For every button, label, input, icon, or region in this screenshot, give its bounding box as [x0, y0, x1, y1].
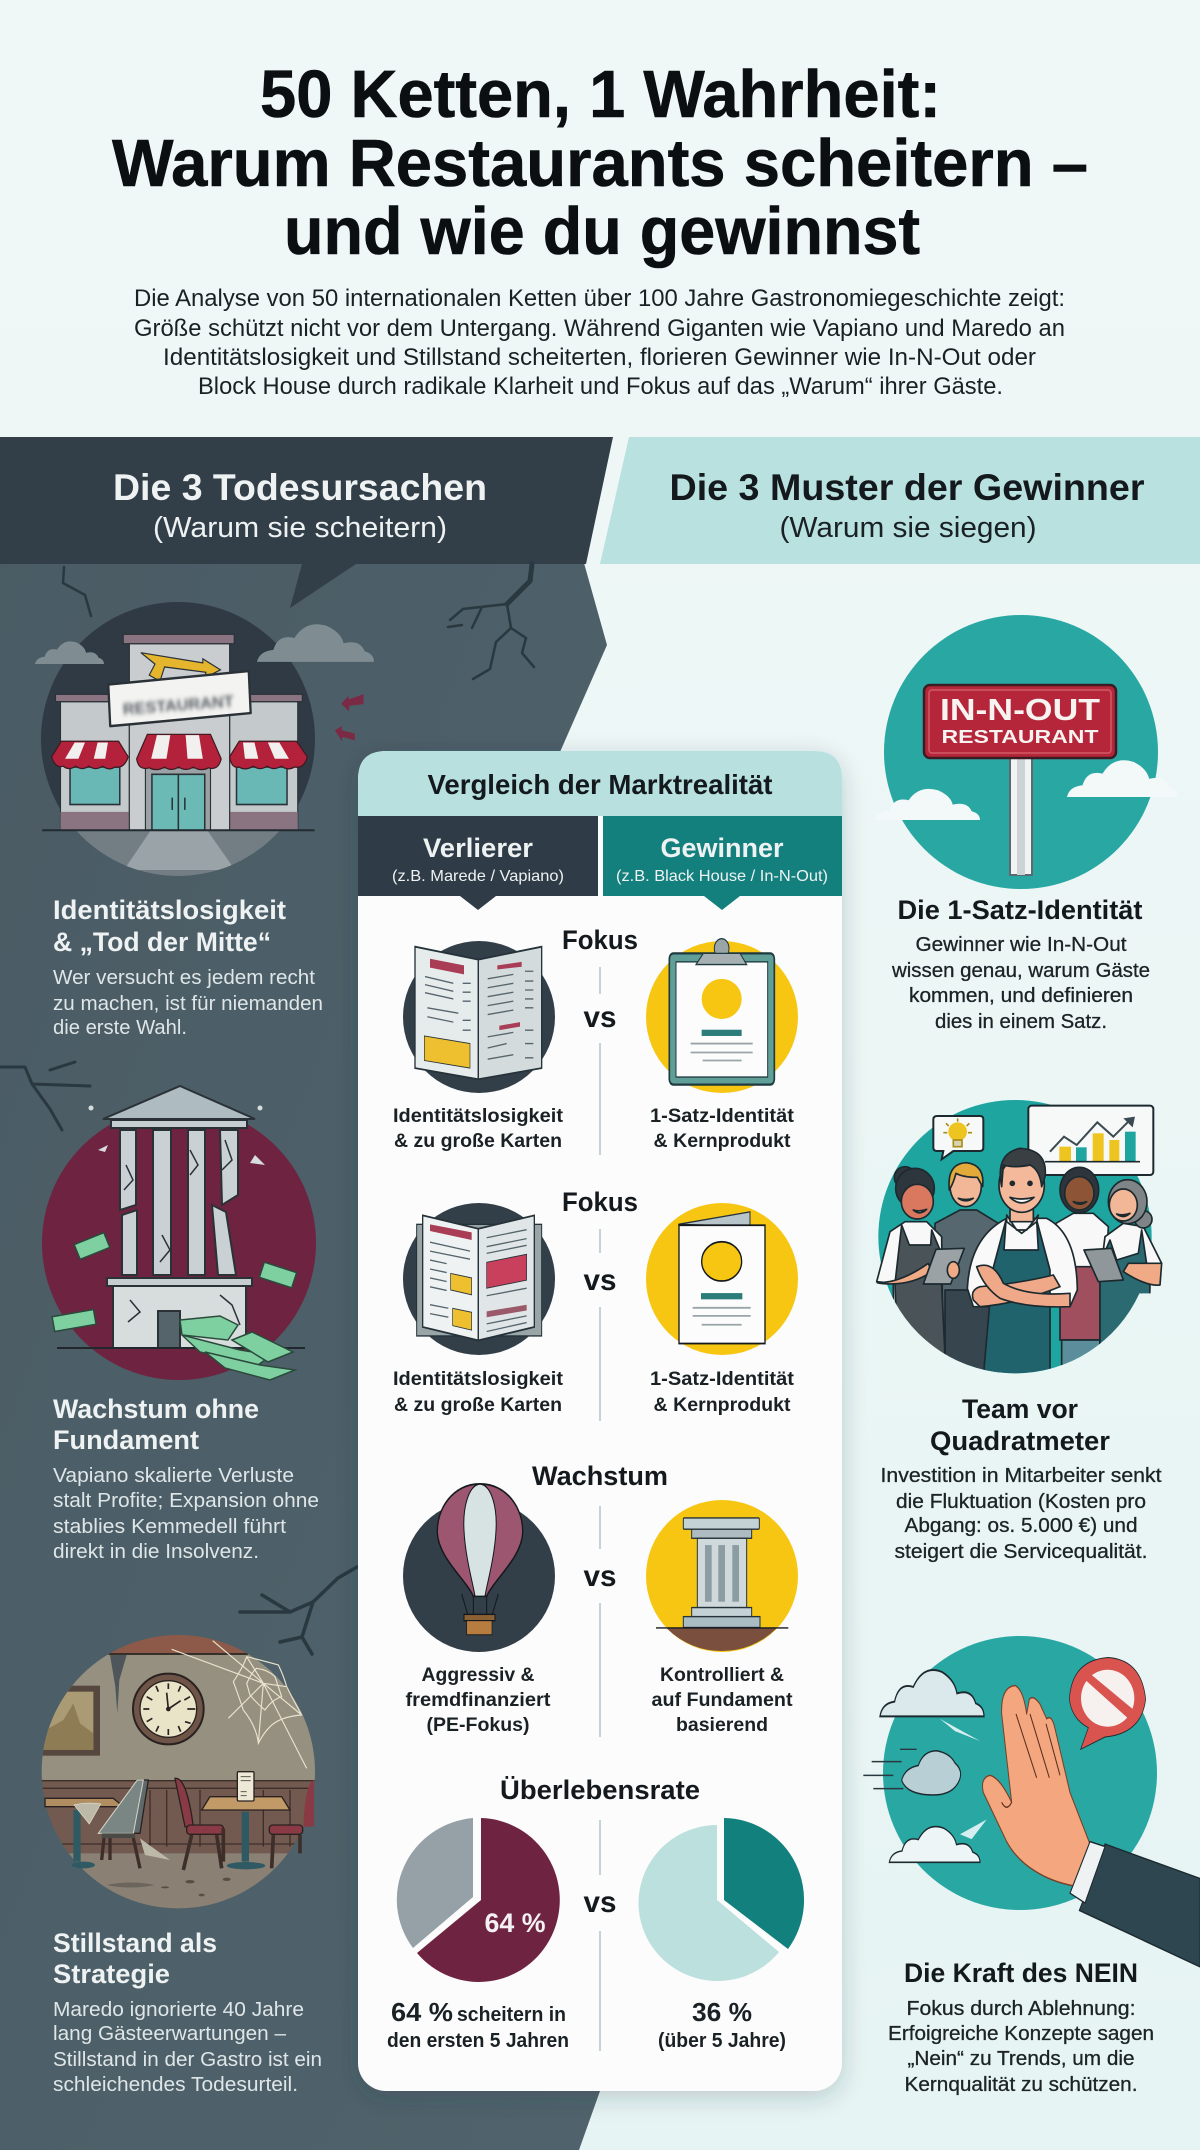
text: pattern 2: Abgang: os. 5.000 €) und [904, 1515, 1138, 1537]
vs label: vs [584, 1001, 616, 1034]
pie caption: failure: 64 % [391, 1997, 453, 2027]
card heading [358, 751, 842, 816]
dark left panel [0, 437, 611, 2150]
icon: solid column [640, 1500, 803, 1655]
text: cause 2: direkt in die Insolvenz. [53, 1541, 259, 1563]
row 3 captions: auf Fundament [652, 1690, 793, 1711]
pie caption: failure: den ersten 5 Jahren [387, 2030, 569, 2052]
column header: winners: Gewinner [660, 833, 784, 863]
title: Warum Restaurants scheitern – [112, 126, 1088, 201]
panel: comparison card [358, 751, 842, 2091]
row 1 captions: Identitätslosigkeit [393, 1106, 564, 1127]
row 1 captions: & zu große Karten [394, 1131, 562, 1152]
intro text block: Größe schützt nicht vor dem Untergang. Während Giganten wie Vapiano und Maredo an [134, 315, 1065, 342]
pie chart: survival rate [639, 1818, 804, 1981]
icon: abandoned restaurant interior [42, 1635, 315, 1908]
text: cause 3: Stillstand als [53, 1928, 217, 1958]
text: cause 3: Stillstand in der Gastro ist ein [53, 2049, 322, 2071]
text: cause 1: zu machen, ist für niemanden [53, 993, 323, 1015]
text: pattern 1: dies in einem Satz. [935, 1011, 1107, 1033]
icon: one page card [646, 1203, 798, 1355]
icon: failed restaurant [35, 602, 374, 880]
text: cause 2: Vapiano skalierte Verluste [53, 1465, 294, 1487]
icon: in-n-out sign: IN-N-OUT [940, 692, 1100, 727]
column header: losers: (z.B. Marede / Vapiano) [392, 868, 564, 885]
text: pattern 2 [880, 1394, 1162, 1563]
row 3: Wachstum heading: Wachstum [532, 1461, 668, 1491]
icon: crumbling bank with money [42, 1086, 316, 1380]
text: pattern 1: wissen genau, warum Gäste [891, 960, 1150, 982]
vs label: vs [584, 1560, 616, 1593]
vs label: vs [584, 1264, 616, 1297]
row 1 captions: 1-Satz-Identität [650, 1106, 795, 1127]
text: cause 2: stalt Profite; Expansion ohne [53, 1490, 319, 1512]
text: cause 2: Wachstum ohne [53, 1394, 259, 1424]
icon: in-n-out sign: RESTAURANT [942, 727, 1098, 747]
text: cause 3: lang Gästeerwartungen – [53, 2023, 287, 2045]
intro text block: Identitätslosigkeit und Stillstand scheiterten, florieren Gewinner wie In-N-Out oder [163, 344, 1036, 371]
row 1 captions: & Kernprodukt [654, 1131, 791, 1152]
header: causes: (Warum sie scheitern) [153, 512, 447, 544]
text: cause 1: Wer versucht es jedem recht [53, 967, 315, 989]
card heading: Vergleich der Marktrealität [428, 769, 772, 800]
header: winners: (Warum sie siegen) [780, 512, 1036, 544]
text: cause 1 [53, 895, 323, 1039]
pie chart: failure rate [397, 1818, 560, 1982]
intro text block [134, 285, 1065, 400]
text: pattern 2: Investition in Mitarbeiter senkt [880, 1465, 1162, 1487]
text: pattern 3: Fokus durch Ablehnung: [906, 1998, 1136, 2020]
row 3 captions: basierend [676, 1715, 768, 1736]
column header: losers [358, 816, 598, 910]
text: cause 1: Identitätslosigkeit [53, 895, 286, 925]
row 3 captions: Aggressiv & [422, 1665, 535, 1686]
row 3 captions: Kontrolliert & [660, 1665, 784, 1686]
text: pattern 2: steigert die Servicequalität. [894, 1541, 1148, 1563]
text: cause 3 [53, 1928, 322, 2096]
icon: clipboard [646, 939, 798, 1093]
text: pattern 2: Team vor [962, 1394, 1078, 1424]
text: pattern 1: kommen, und definieren [909, 985, 1133, 1007]
row 2 captions: Identitätslosigkeit [393, 1369, 564, 1390]
text: pattern 3: Kernqualität zu schützen. [904, 2074, 1138, 2096]
text: pattern 1: Die 1-Satz-Identität [898, 895, 1143, 925]
text: pattern 2: Quadratmeter [930, 1426, 1110, 1456]
header: winners [600, 437, 1200, 564]
text: cause 3: schleichendes Todesurteil. [53, 2074, 298, 2096]
text: cause 2: stablies Kemmedell führt [53, 1516, 286, 1538]
text: pattern 1 [891, 895, 1150, 1033]
text: pattern 2: die Fluktuation (Kosten pro [896, 1491, 1146, 1513]
text: cause 2: Fundament [53, 1425, 199, 1455]
row 2: Fokus heading: Fokus [562, 1187, 638, 1217]
text: cause 3: Maredo ignorierte 40 Jahre [53, 1999, 304, 2021]
text: pattern 3 [888, 1958, 1154, 2096]
title: 50 Ketten, 1 Wahrheit: [260, 57, 941, 132]
icon: in-n-out sign [875, 615, 1178, 889]
row 2 captions: & zu große Karten [394, 1395, 562, 1416]
header: causes: Die 3 Todesursachen [113, 467, 487, 508]
icon: large menu [403, 941, 555, 1093]
pie caption: survival [658, 1997, 786, 2052]
title [112, 57, 1088, 269]
row 1 captions [393, 1106, 795, 1152]
text: pattern 3: Die Kraft des NEIN [904, 1958, 1138, 1988]
pie caption: survival: 36 % [692, 1997, 752, 2027]
intro text block: Block House durch radikale Klarheit und Fokus auf das „Warum“ ihrer Gäste. [198, 373, 1003, 400]
icon: failed restaurant: RESTAURANT [122, 693, 235, 719]
row 1: Fokus heading: Fokus [562, 925, 638, 955]
intro text block: Die Analyse von 50 internationalen Ketten über 100 Jahre Gastronomiegeschichte zeigt: [134, 285, 1065, 312]
header: winners: Die 3 Muster der Gewinner [670, 467, 1144, 508]
row 3 captions: (PE-Fokus) [426, 1715, 530, 1736]
icon: open menu book [403, 1203, 555, 1355]
row 2 captions: & Kernprodukt [654, 1395, 791, 1416]
pie caption: failure: scheitern in [457, 2004, 566, 2026]
pie chart: failure rate: 64 % [484, 1908, 546, 1938]
text: cause 2 [53, 1394, 319, 1563]
column header: winners: (z.B. Black House / In-N-Out) [616, 868, 828, 885]
icon: team with chart [877, 1100, 1162, 1377]
row 4: Überlebensrate heading: Überlebensrate [500, 1775, 700, 1805]
row 3 captions: fremdfinanziert [406, 1690, 551, 1711]
vs label: vs [584, 1886, 616, 1919]
text: pattern 3: „Nein“ zu Trends, um die [908, 2048, 1134, 2070]
row 2 captions [393, 1369, 795, 1416]
text: cause 3: Strategie [53, 1959, 170, 1989]
row 3 captions [406, 1665, 793, 1736]
column header: winners [603, 816, 842, 910]
header: causes [0, 437, 613, 608]
title: und wie du gewinnst [284, 194, 920, 269]
text: cause 1: die erste Wahl. [53, 1017, 187, 1039]
icon: hand saying no [863, 1636, 1200, 1967]
column header: losers: Verlierer [423, 833, 533, 863]
icon: hot air balloon [403, 1484, 555, 1652]
pie caption: failure [387, 1997, 569, 2052]
pie caption: survival: (über 5 Jahre) [658, 2030, 786, 2052]
wall cracks [0, 564, 534, 1654]
text: cause 1: & „Tod der Mitte“ [53, 927, 271, 957]
text: pattern 3: Erfoigreiche Konzepte sagen [888, 2023, 1154, 2045]
text: pattern 1: Gewinner wie In-N-Out [916, 934, 1127, 956]
row 2 captions: 1-Satz-Identität [650, 1369, 795, 1390]
